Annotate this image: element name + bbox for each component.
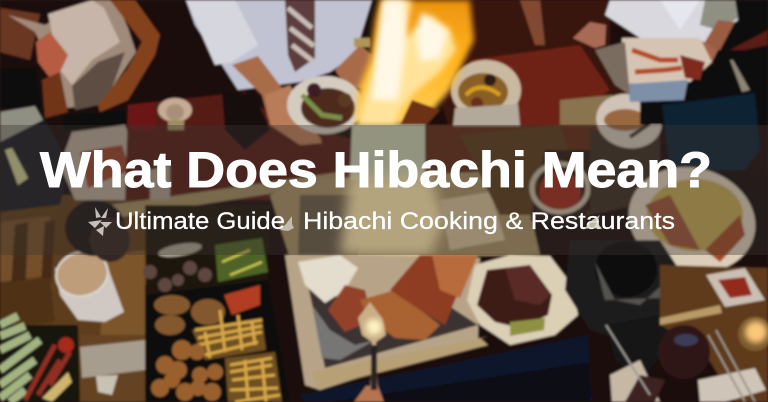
icon: leaf over guide — [280, 216, 294, 231]
small bowl with sauce — [591, 88, 667, 154]
dark blue panel and person right — [573, 0, 768, 250]
dark cup — [65, 200, 130, 262]
big plate with noodles right — [617, 153, 767, 287]
icon: white leaf sprig left of subtitle — [88, 207, 112, 236]
subtitle — [115, 208, 675, 235]
food tray with chicken and fries — [143, 205, 290, 402]
rice and meats on griddle — [298, 255, 478, 360]
left table items — [0, 106, 140, 212]
wooden table right — [660, 265, 768, 402]
man: shirt — [186, 0, 372, 145]
translucent overlay band — [0, 125, 768, 255]
icon: leaf over restaurants — [584, 215, 602, 229]
vegetable dish bottom left — [0, 316, 145, 402]
woman: skin, dress and arms — [0, 0, 160, 118]
flames — [355, 0, 474, 125]
dinner plate with noodles — [451, 60, 521, 126]
burner stove and pot — [565, 240, 712, 380]
griddle and flame under title — [270, 125, 540, 258]
plate with salad — [287, 76, 363, 134]
spoon and hand — [354, 302, 386, 402]
title: What Does Hibachi Mean? — [40, 142, 712, 198]
tray with sliced meat — [595, 38, 712, 102]
paper cup bowl — [158, 98, 192, 130]
subtitle: Hibachi Cooking & Restaurants — [303, 208, 675, 235]
griddle body — [285, 255, 592, 402]
placemats mid-right — [460, 95, 660, 225]
white plate with grilled steak — [467, 255, 578, 345]
red table centre-left — [110, 90, 355, 218]
subtitle: Ultimate Guide — [115, 208, 285, 235]
cutlery and napkin — [698, 330, 766, 402]
wine glass — [606, 325, 710, 402]
red wood table right — [372, 0, 650, 190]
wooden table left — [0, 195, 150, 402]
metal cup with milk — [50, 246, 124, 322]
candle — [738, 317, 768, 351]
small dish red — [706, 268, 765, 307]
